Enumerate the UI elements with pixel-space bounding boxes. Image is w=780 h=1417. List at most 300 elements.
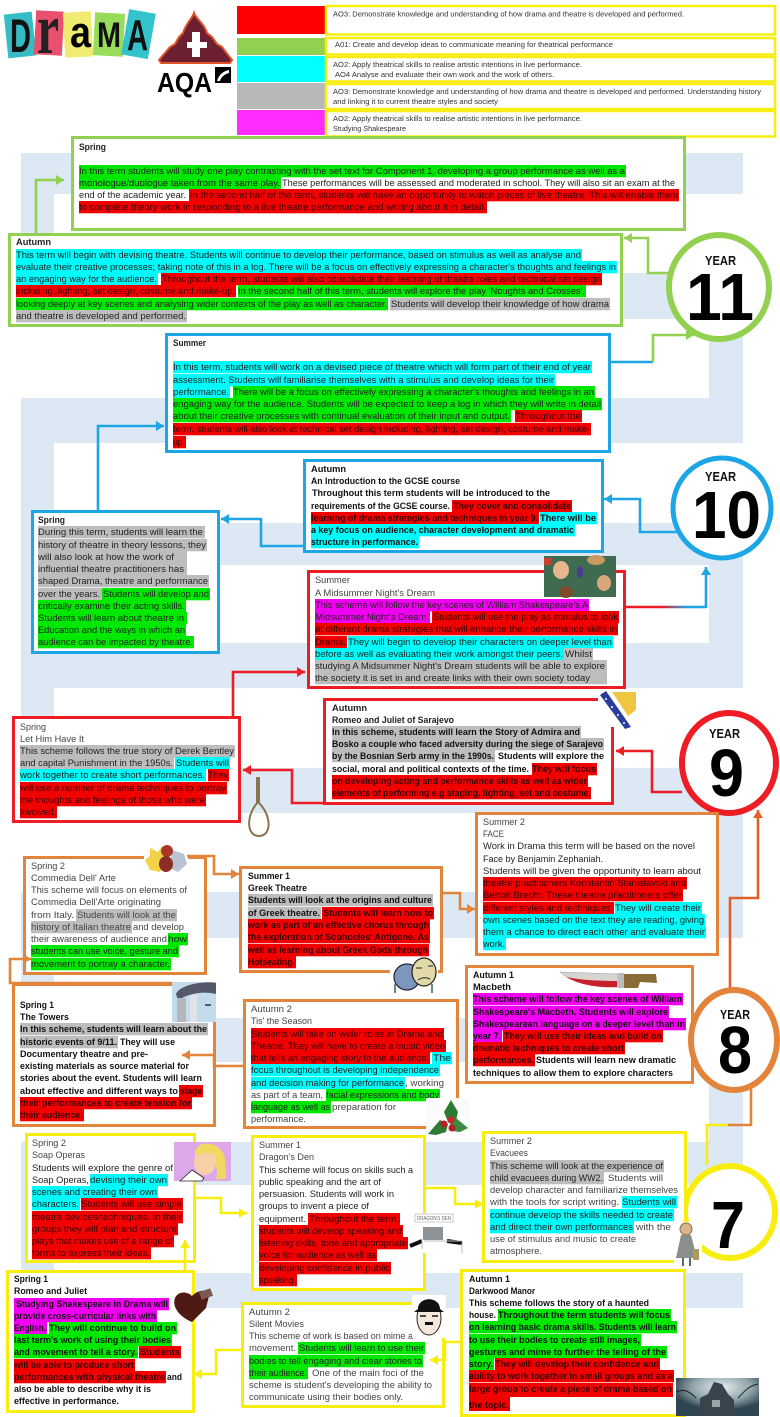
text block: Greek Theatre body: Hotseating. <box>248 957 295 968</box>
text block: Commedia body: students can use voice, gesture and <box>31 946 178 957</box>
heading: Autumn: Autumn <box>16 237 51 248</box>
heading: Spring Let Him Have It: Let Him Have It <box>20 734 84 745</box>
heading: Spring 2 Commedia Dell' Arte <box>31 861 116 884</box>
legend row: AO2 magenta: AO2: Apply theatrical skills to realise artistic intentions in live performance. <box>333 114 582 123</box>
text block: Silent Movies body: scheme is student's developing the ability to <box>249 1380 432 1391</box>
text block: Spring body: Students will develop and <box>103 589 209 600</box>
text block: Dragon's Den body: developing confidence in public <box>259 1263 390 1274</box>
text block: Summer body: Throughout the <box>515 411 581 422</box>
heading: Autumn 2 Silent Movies: Silent Movies <box>249 1319 304 1330</box>
text block: Macbeth body: performances. <box>473 1055 534 1066</box>
text block: Evacuees body: and direct their own performances <box>490 1222 633 1233</box>
text block: Silent Movies body: One of the main foci of the <box>312 1368 424 1379</box>
text block: Autumn body: There will be <box>540 513 596 524</box>
text block: Autumn body: Throughout the term, students will also consolidate their learning of theatre roles and technical set design <box>162 274 601 285</box>
text block: Greek Theatre body: work as part of an effective chorus through <box>247 920 429 931</box>
badge: Year 9: YEAR <box>709 726 741 741</box>
text block: Autumn body: Students will explore the <box>498 751 604 762</box>
heading: Autumn Romeo and Juliet of Sarajevo: Romeo and Juliet of Sarajevo <box>332 715 454 726</box>
heading: Spring 2 Commedia Dell' Arte: Commedia Dell' Arte <box>31 873 116 884</box>
text block: Spring body: Education and the ways in which an <box>38 625 185 636</box>
text block: Autumn body: They will focus <box>532 764 596 775</box>
text block: Macbeth body: Shakespeare's Macbeth. Students will explore <box>473 1007 668 1018</box>
text block: Evacuees body: This scheme will look at the experience of <box>490 1161 663 1172</box>
text block: Spring body: will use a number of drama techniques to portray <box>19 783 226 794</box>
text block: Season body: facial expressions and body <box>326 1090 439 1101</box>
image: twin towers <box>172 982 216 1022</box>
text block: FACE body <box>482 841 706 950</box>
heading: Autumn An Introduction to the GCSE course <box>311 464 460 487</box>
text block: Spring body: the thoughts and feelings of those who were <box>20 795 205 806</box>
badge: Year 11: 11 <box>686 260 754 335</box>
heading: Summer 2 Evacuees <box>490 1136 532 1159</box>
text block: FACE body: They will create their <box>615 903 702 914</box>
text block: Darkwood Manor body: gestures and mime to further the telling of the <box>469 1347 666 1358</box>
text block: Summer body: before as well as evaluating their work amongst their peers. <box>315 649 563 660</box>
arrow: Darkwood Manor to Silent Movies <box>430 1342 460 1360</box>
panel: Year 7 Spring 1 Romeo and Juliet <box>8 1272 194 1412</box>
text block: Macbeth body: Students will learn new dramatic <box>536 1055 677 1066</box>
text block: Soap Operas body <box>32 1163 183 1259</box>
heading: Autumn Romeo and Juliet of Sarajevo <box>332 703 454 726</box>
text block: The Towers body: existing materials as source material for <box>20 1061 189 1072</box>
text block: The Towers body: their performances to create tension for <box>20 1098 191 1109</box>
text block: Soap Operas body: Soap Operas, <box>32 1175 89 1186</box>
heading: Autumn 2 Silent Movies <box>249 1307 304 1330</box>
arrow: Year 8 circle to Year 7 circle <box>707 1088 751 1165</box>
background: snake path <box>21 153 743 1308</box>
text block: Darkwood Manor body: house. <box>469 1310 496 1321</box>
title: Drama cut-out letters: D <box>10 9 31 62</box>
arrow: Year 9 Summer to Year 10 circle <box>626 606 706 608</box>
text block: Romeo and Juliet body: also be able to describe why it is <box>14 1384 151 1395</box>
panel: Year 9 Autumn <box>324 700 612 804</box>
text block: Spring body: shaped Drama, theatre and performance <box>38 576 208 587</box>
panel: Year 9 Spring <box>14 718 240 822</box>
heading: Spring 1 The Towers: Spring 1 <box>20 1000 55 1011</box>
icon: noose <box>249 777 269 836</box>
text block: Greek Theatre body: the exploration of Sophocles' Antigone. As <box>248 932 429 943</box>
badge: Year 9 <box>682 713 776 813</box>
heading: Spring: Spring <box>38 515 65 526</box>
legend row: AO3 grey <box>237 83 775 109</box>
text block: Autumn body: an engaging way for the audience. <box>16 274 157 285</box>
text block: Evacuees body: Students will <box>608 1173 663 1184</box>
text block: Spring body <box>79 165 679 213</box>
text block: Spring body: will also look at how the work of <box>37 552 174 563</box>
text block: Spring body: and capital Punishment in the 1950s. <box>20 758 173 769</box>
arrow: Year 10 circle to Autumn <box>604 499 677 532</box>
icon: bloody knife <box>560 972 657 988</box>
text block: Autumn body: on developing acting and performance skills as well as wider <box>332 776 587 787</box>
panel: Year 10 Autumn <box>304 460 602 552</box>
arrow: Commedia to Greek Theatre <box>187 856 239 874</box>
legend row: AO3 grey: AO3: Demonstrate knowledge and understanding of how drama and theatre is developed and performed. Understanding history <box>333 87 761 96</box>
text block: Dragon's Den body: This scheme will focus on skills such a <box>259 1165 414 1176</box>
text block: Spring body: history of theatre in theory lessons, they <box>38 540 206 551</box>
text block: Season body: The <box>433 1053 451 1064</box>
heading: Autumn 1 Darkwood Manor <box>469 1274 535 1297</box>
text block: Summer body: at different drama strategies that will enhance their performance skills in <box>315 624 617 635</box>
text block: Greek Theatre body: well as learning about Greek Gods through <box>247 945 428 956</box>
text block: Commedia body: how <box>168 934 187 945</box>
text block: Darkwood Manor body: Throughout the term students will focus <box>498 1310 670 1321</box>
text block: Summer body: the society it is set in and create links with their own society today <box>315 673 590 684</box>
text block: Season body <box>251 1028 452 1125</box>
text block: Romeo and Juliet body: English. <box>14 1323 46 1334</box>
heading: Summer 1 Greek Theatre: Greek Theatre <box>248 883 307 894</box>
text block: Romeo and Juliet body: last term's work of using their bodies <box>14 1335 171 1346</box>
heading: Summer A Midsummer Night's Dream: A Midsummer Night's Dream <box>315 588 435 599</box>
text block: Autumn body: by the Bosnian Serb army in the 1990s. <box>332 751 494 762</box>
icon: Commedia figure <box>144 845 188 874</box>
legend row: AO1 green: A01: Create and develop ideas to communicate meaning for theatrical performance <box>335 40 613 49</box>
icon: Bosnian flag <box>598 691 638 729</box>
text block: Summer body <box>173 361 602 448</box>
text block: Commedia body <box>31 885 188 970</box>
icon: AQA emblem <box>159 13 232 63</box>
text block: Autumn body: learning of drama strategies and techniques in year 9. <box>311 513 538 524</box>
text block: Romeo and Juliet body: Students <box>140 1347 180 1358</box>
arrow: Year 10 Autumn to Spring <box>221 519 303 546</box>
icon: holly <box>426 1098 470 1135</box>
badge: Year 11: YEAR <box>705 253 737 268</box>
text block: Commedia body: Students will look at the <box>77 910 176 921</box>
text block: Autumn body: Throughout this term students will be introduced to the <box>312 488 550 499</box>
image: haunted manor <box>676 1378 759 1416</box>
badge: Year 10: YEAR <box>705 469 737 484</box>
text block: The Towers body: In this scheme, students will learn about the <box>20 1024 207 1035</box>
text block: Autumn body: Bosko a couple who faced adversity during the siege of Sarajevo <box>332 739 603 750</box>
image: Midsummer faces <box>544 555 616 598</box>
text block: Season body: that tells an engaging story to the audience. <box>251 1053 429 1064</box>
text block: Autumn body: including, lighting, set design, costume and make-up. <box>16 286 235 297</box>
badge: Year 11 <box>669 235 769 339</box>
text block: Macbeth body <box>473 993 686 1079</box>
heading: Spring 2 Soap Operas: Spring 2 <box>32 1138 66 1149</box>
text block: Romeo and Juliet body: Studying Shakespeare in Drama will <box>16 1299 168 1310</box>
text block: The Towers body <box>20 1023 208 1121</box>
text block: Darkwood Manor body: ability to work together in small groups and as a <box>469 1371 674 1382</box>
text block: Greek Theatre body <box>247 894 434 968</box>
text block: FACE body: Work in Drama this term will be based on the novel <box>483 841 695 852</box>
text block: Dragon's Den body: public speaking and the art of <box>259 1177 381 1188</box>
heading: Autumn 1 Darkwood Manor: Autumn 1 <box>469 1274 511 1285</box>
text block: Spring body: work together to create short performances. <box>19 770 205 781</box>
text block: Autumn body <box>332 726 604 799</box>
text block: Evacuees body: with the tools for script writing. <box>489 1197 619 1208</box>
arrow: Year 9 Autumn to Spring <box>243 770 323 803</box>
text block: Darkwood Manor body: This scheme follows the story of a haunted <box>469 1298 649 1309</box>
text block: Commedia body: movement to portray a character. <box>31 959 170 970</box>
text block: Commedia body: Commedia Dell'Arte originating <box>31 897 161 908</box>
text block: Dragon's Den body: Throughout the term, <box>309 1214 399 1225</box>
heading: Summer 2 Evacuees: Evacuees <box>490 1148 528 1159</box>
text block: Dragon's Den body: equipment. <box>259 1214 306 1225</box>
panel: Year 8 Autumn 2 Tis' the Season <box>244 1000 458 1128</box>
text block: Season body: performance. <box>251 1114 306 1125</box>
text block: Greek Theatre body: Students will learn how to <box>323 908 433 919</box>
text block: Summer body <box>315 599 619 684</box>
heading: Spring 2 Commedia Dell' Arte: Spring 2 <box>31 861 65 872</box>
text block: Season body: preparation for <box>332 1102 397 1113</box>
icon: evacuee girl <box>674 1222 702 1268</box>
text block: Soap Operas body: devising their own <box>90 1175 167 1186</box>
heading: Spring 1 The Towers <box>20 1000 69 1023</box>
text block: Commedia body: their awareness of audience and <box>31 934 167 945</box>
text block: Dragon's Den body: students will develop speaking and <box>259 1226 402 1237</box>
text block: Evacuees body: use of stimulus and music to create <box>490 1234 636 1245</box>
text block: Autumn body: They cover and consolidate <box>453 501 571 512</box>
text block: Summer body: up. <box>173 437 185 448</box>
panel: Year 11 Autumn <box>10 234 622 326</box>
text block: Silent Movies body: Students will learn to use their <box>299 1343 425 1354</box>
badge: Year 8: 8 <box>718 1013 752 1088</box>
text block: Season body: , working <box>405 1078 444 1089</box>
text block: Romeo and Juliet body: performances with physical theatre <box>14 1372 165 1383</box>
heading: Summer 1 Greek Theatre <box>248 871 307 894</box>
text block: The Towers body: stories about the event. Students will learn <box>20 1073 202 1084</box>
text block: FACE body: work. <box>482 939 505 950</box>
panel: Year 9 Summer <box>308 572 624 688</box>
heading: Autumn 1 Macbeth: Macbeth <box>473 982 511 993</box>
legend row: AO2 AO4 cyan <box>237 56 775 82</box>
legend row: AO3 red <box>237 6 775 34</box>
text block: Dragon's Den body: speaking. <box>259 1275 296 1286</box>
legend row: AO3 red: AO3: Demonstrate knowledge and understanding of how drama and theatre is developed and performed. <box>333 10 684 18</box>
text block: Spring body: In this term students will study one play contrasting with the set text for Component 1, developing a group performance as well as a <box>79 166 626 177</box>
panel: Year 8 Summer 2 FACE <box>476 814 718 954</box>
text block: Spring body: In the second half of the term, students will have an opportunity to watch pieces of live theatre. This will enable them <box>190 190 678 201</box>
arrow: Greek Theatre to FACE <box>442 893 475 909</box>
text block: Summer body: Drama. <box>315 637 346 648</box>
text block: Spring body: to complete theory work in responding to a live theatre performance and writing about it in detail. <box>79 202 486 213</box>
text block: FACE body: Students will be given the opportunity to learn about <box>483 866 701 877</box>
panel: Year 8 Summer 1 Greek Theatre <box>240 868 442 972</box>
text block: Summer body: assessment. Students will familiarise themselves with a stimulus and develop ideas for their <box>173 375 555 386</box>
arrow: Year 8 circle to Year 9 circle <box>730 810 758 990</box>
text block: Commedia body: and develop <box>133 922 184 933</box>
text block: The Towers body: They will use <box>120 1037 175 1048</box>
title: Drama cut-out letters: a <box>70 8 91 57</box>
text block: Summer body: There will be a focus on effectively expressing a character's thoughts and feelings in an <box>233 387 594 398</box>
title: Drama cut-out letters <box>4 0 156 69</box>
text block: Dragon's Den body: persuasion. Students will work in <box>259 1189 394 1200</box>
heading: Summer 1 Dragon's Den <box>259 1140 314 1163</box>
text block: Summer body: term, students will also look at technical set design including, lighting, set design, costume and make- <box>173 424 590 435</box>
text block: Season body: Theatre. They will have to create a music video <box>251 1041 445 1052</box>
badge: Year 7 <box>685 1166 775 1263</box>
text block: Soap Operas body: scenes and creating their own <box>32 1187 157 1198</box>
text block: Summer body: engaging way for the audience. Students will be expected to keep a log in which they will write in detail <box>173 399 601 410</box>
heading: Autumn 1 Darkwood Manor: Darkwood Manor <box>469 1286 535 1297</box>
heading: Spring 1 Romeo and Juliet <box>14 1274 88 1297</box>
panel: Year 11 Spring <box>72 138 684 230</box>
legend row: AO2 AO4 cyan: AO2: Apply theatrical skills to realise artistic intentions in live performance. <box>333 60 582 69</box>
arrow: Soap Operas to Dragon's Den <box>196 1198 247 1213</box>
text block: Romeo and Juliet body <box>13 1298 182 1407</box>
text block: Autumn body <box>16 249 617 322</box>
heading: Spring Let Him Have It: Spring <box>20 722 46 733</box>
heading: Summer 1 Greek Theatre: Summer 1 <box>248 871 291 882</box>
text block: Spring body: Students will <box>176 758 229 769</box>
text block: Summer body: Whilst <box>565 649 592 660</box>
text block: Spring body: involved. <box>20 807 56 818</box>
text block: Autumn body: a key focus on audience, character development and dramatic <box>311 525 575 536</box>
badge: Year 8 <box>691 990 777 1090</box>
text block: Dragon's Den body <box>259 1165 414 1286</box>
text block: Spring body: This scheme follows the true story of Derek Bentley <box>20 746 234 757</box>
badge: Year 7: 7 <box>711 1188 745 1263</box>
text block: Autumn body: requirements of the GCSE course. <box>311 501 450 512</box>
text block: The Towers body: stage <box>180 1086 202 1097</box>
arrow: Romeo and Juliet to Soap Operas <box>184 1240 186 1270</box>
text block: Commedia body: This scheme will focus on elements of <box>31 885 187 896</box>
text block: Greek Theatre body: Students will look at the origins and culture <box>248 895 432 906</box>
text block: Season body: language as well as <box>251 1102 330 1113</box>
heading: Spring 2 Soap Operas: Soap Operas <box>32 1150 85 1161</box>
text block: Season body: and decision making for performance <box>251 1078 404 1089</box>
text block: Autumn body: elements of performing e.g staging, lighting, set and costume. <box>332 788 591 799</box>
text block: Summer body: Midsummer Night's Dream. <box>315 612 429 623</box>
panel: Year 8 Autumn 1 Macbeth <box>466 966 692 1082</box>
panel: Year 10 Summer <box>166 334 610 452</box>
panel: Year 7 Summer 1 Dragon's Den <box>252 1136 424 1290</box>
text block: Summer body: In this term, students will work on a devised piece of theatre which will form part of their end of year <box>173 362 592 373</box>
arrow: Dragon's Den to Evacuees <box>426 1188 483 1204</box>
badge: Year 9: 9 <box>709 736 744 811</box>
text block: Romeo and Juliet body: and movement to tell a story. <box>14 1347 137 1358</box>
arrow: Year 9 circle to Autumn <box>616 751 682 792</box>
legend row: AO3 grey: and linking it to current theatre styles and society <box>333 97 498 106</box>
image: Dragon's Den set <box>409 1213 464 1253</box>
text block: FACE body: theatre practitioners Konstantin Stanislavski and <box>483 878 686 889</box>
text block: Spring body <box>19 745 235 818</box>
heading: Summer 2 FACE <box>483 817 525 840</box>
text block: Dragon's Den body: listening skills, tone and appropriate <box>259 1238 407 1249</box>
badge: Year 10: 10 <box>692 478 761 553</box>
text block: Summer body: about their creative processes with continual evaluation of their input and output. <box>173 411 510 422</box>
text block: Autumn body: social, moral and political contexts of the time. <box>332 764 529 775</box>
panel: Year 7 Summer 2 Evacuees <box>484 1132 686 1262</box>
text block: Macbeth body: dramatic techniques to create short <box>473 1043 625 1054</box>
icon: theatre masks <box>390 958 438 993</box>
heading: Autumn 1 Macbeth: Autumn 1 <box>473 970 515 981</box>
text block: Soap Operas body: Students will use simple <box>81 1199 182 1210</box>
text block: FACE body: Bertolt Brecht. These theatre practitioners offer <box>483 890 683 901</box>
arrow: Year 11 circle to Autumn <box>624 238 670 273</box>
text block: Macbeth body: techniques to allow them to explore characters <box>473 1068 673 1079</box>
text block: Silent Movies body <box>249 1331 432 1403</box>
text block: FACE body: own scenes based on the text they are reading, giving <box>483 915 704 926</box>
text block: Romeo and Juliet body: They will continue to build on <box>49 1323 176 1334</box>
text block: Spring body: critically examine their acting skills. <box>38 601 185 612</box>
heading: Autumn An Introduction to the GCSE course: An Introduction to the GCSE course <box>311 476 460 487</box>
text block: Season body: Students will take on wider roles in Drama and <box>251 1029 443 1040</box>
text block: Soap Operas body: theatre devices/techniques. In their <box>32 1212 183 1223</box>
icon: broken heart <box>174 1288 213 1322</box>
text block: Macbeth body: They will use their ideas and build on <box>504 1031 662 1042</box>
text block: Soap Operas body: groups they will plan and structure <box>32 1224 177 1235</box>
panel: Year 8 Spring 2 Commedia <box>24 858 206 974</box>
text block: Evacuees body: child evacuees during WW2. <box>490 1173 603 1184</box>
heading: Autumn 1 Macbeth <box>473 970 515 993</box>
heading: Autumn Romeo and Juliet of Sarajevo: Autumn <box>332 703 367 714</box>
panel: Year 7 Autumn 2 Silent Movies <box>242 1304 444 1406</box>
text block: Romeo and Juliet body: effective in performance. <box>14 1396 119 1407</box>
text block: Evacuees body: atmosphere. <box>490 1246 542 1257</box>
image: soap opera comic <box>174 1142 231 1181</box>
arrow: Autumn 2 to The Towers <box>182 1055 243 1066</box>
text block: Soap Operas body: Students will explore the genre of <box>32 1163 173 1174</box>
text block: Autumn body: In the second half of this term, students will explore the play 'Noughts and Crosses', <box>238 286 585 297</box>
text block: Autumn body: Students will develop their knowledge of how drama <box>391 299 610 310</box>
heading: Summer A Midsummer Night's Dream <box>315 575 435 599</box>
text block: Silent Movies body: bodies to tell engaging and clear stories to <box>249 1356 422 1367</box>
arrow: Year 10 Summer to Year 11 circle <box>611 335 694 362</box>
text block: Summer body: Students will use the play as stimulus to look <box>433 612 618 623</box>
text block: FACE body: Face by Benjamin Zephaniah. <box>483 854 603 865</box>
text block: Autumn body <box>311 488 597 548</box>
heading: Spring Let Him Have It <box>20 722 84 745</box>
text block: Autumn body: structure in performance. <box>311 537 418 548</box>
panel: Year 10 Spring <box>32 512 218 652</box>
text block: Evacuees body: Students will <box>622 1197 676 1208</box>
text block: Spring body: They <box>208 770 228 781</box>
text block: Darkwood Manor body: large group to create a piece of drama based on <box>469 1384 672 1395</box>
heading: Spring: Spring <box>79 142 106 153</box>
heading: Autumn An Introduction to the GCSE course: Autumn <box>311 464 346 475</box>
heading: Summer 2 FACE: FACE <box>483 829 504 840</box>
text block: Darkwood Manor body: They will develop their confidence and <box>495 1359 659 1370</box>
text block: Evacuees body <box>489 1160 678 1257</box>
heading: Autumn 2 Silent Movies: Autumn 2 <box>249 1307 290 1318</box>
arrow: head to Year 10 circle <box>705 567 707 608</box>
heading: Spring 1 Romeo and Juliet: Romeo and Juliet <box>14 1286 88 1297</box>
text block: Evacuees body: develop character and familiarize themselves <box>490 1185 678 1196</box>
arrow: Silent Movies to Romeo and Juliet <box>194 1350 241 1374</box>
text block: Spring body: end of the academic year. <box>79 190 186 201</box>
text block: Darkwood Manor body: the topic. <box>469 1400 509 1411</box>
text block: Romeo and Juliet body: provide cross-curricular links with <box>14 1311 156 1322</box>
text block: Dragon's Den body: voice for audience as well as <box>259 1250 376 1261</box>
heading: Spring 1 Romeo and Juliet: Spring 1 <box>14 1274 49 1285</box>
heading: Summer 2 FACE: Summer 2 <box>483 817 525 828</box>
heading: Autumn 2 Tis' the Season: Autumn 2 <box>251 1004 292 1015</box>
heading: Summer 2 Evacuees: Summer 2 <box>490 1136 532 1147</box>
text block: Summer body: This scheme will follow the key scenes of William Shakespeare's A <box>315 600 589 611</box>
icon: Charlie Chaplin <box>412 1295 446 1338</box>
text block: Spring body <box>37 526 210 648</box>
text block: Spring body: During this term, students will learn the <box>38 527 203 538</box>
legend: assessment objectives <box>237 6 775 136</box>
panel: Year 7 Autumn 1 Darkwood Manor <box>462 1270 684 1416</box>
heading: Autumn 2 Tis' the Season <box>251 1004 312 1027</box>
text block: FACE body: different styles and techniques. <box>483 903 613 914</box>
text block: Spring body: over the years. <box>38 589 100 600</box>
panel: Year 8 Spring 1 The Towers <box>14 984 214 1126</box>
text block: Dragon's Den body: groups to invent a piece of <box>259 1201 369 1212</box>
heading: Summer A Midsummer Night's Dream: Summer <box>315 575 351 586</box>
text block: Macbeth body: year 7. <box>473 1031 501 1042</box>
text block: Silent Movies body: movement. <box>249 1343 296 1354</box>
text block: Evacuees body: with the <box>635 1222 671 1233</box>
text block: Summer body: studying A Midsummer Night's Dream students will be able to explore <box>315 661 605 672</box>
text block: The Towers body: their audience. <box>20 1110 83 1121</box>
heading: Spring 2 Soap Operas <box>32 1138 85 1161</box>
text block: Spring body: audience can be impacted by theatre. <box>38 637 193 648</box>
heading: Summer: Summer <box>173 338 206 349</box>
